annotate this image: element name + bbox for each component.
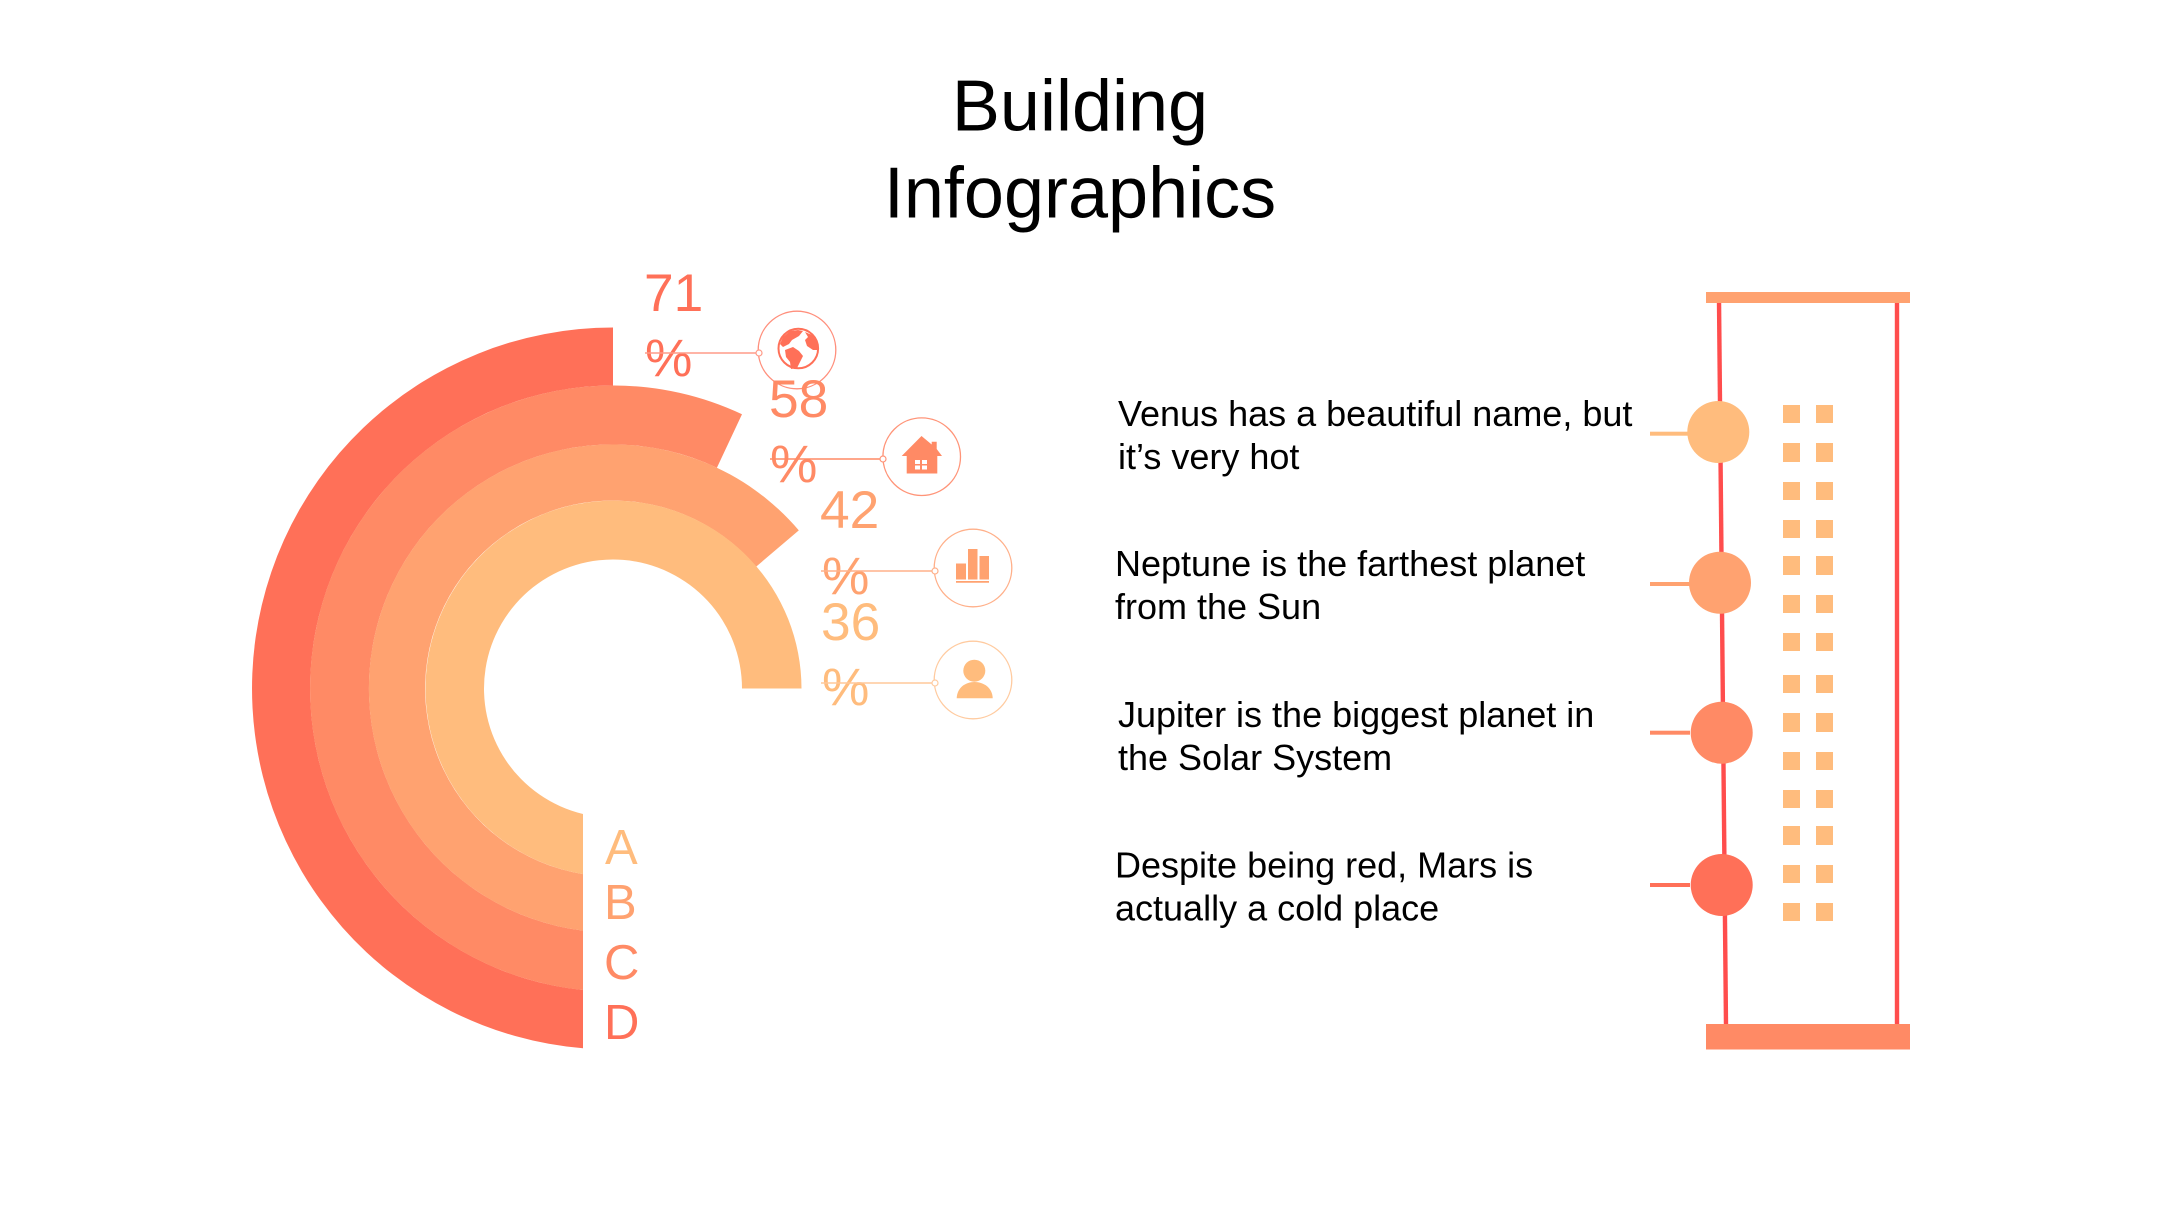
icon ring [934,529,1012,607]
icon: globe [778,329,818,369]
text: Mars: actually a cold place [1115,888,1439,928]
connector line [770,458,883,460]
connector line [821,682,935,684]
ring A [426,501,802,874]
connector line [821,570,935,572]
ring D [252,328,613,1048]
ring label C: C [604,936,639,990]
building base [1706,1024,1910,1050]
text: Venus: Venus has a beautiful name, but [1118,393,1632,434]
connector dot [756,350,762,356]
title: Infographics [884,153,1276,233]
connector dot [880,456,886,462]
text: Mars: Despite being red, Mars is [1115,844,1533,886]
icon: person [957,660,993,698]
callout: 42% chart [820,481,1012,607]
text: Neptune: from the Sun [1115,586,1321,627]
title: Building [952,67,1208,147]
ring B [369,444,799,931]
ring C [310,385,742,990]
building left wall [1719,300,1726,1026]
building roof [1706,292,1910,303]
value 42%: 42 [820,481,879,540]
connector dot [932,568,938,574]
ring label D: D [604,996,639,1050]
text: Jupiter: Jupiter is the biggest planet in [1118,694,1594,735]
marker: Neptune [1650,552,1751,614]
panel: radial bar chart [252,328,802,1050]
ring label A: A [605,821,638,875]
value 58%: % [770,435,817,494]
building windows [1783,405,1833,921]
icon ring [934,641,1012,719]
marker: Mars [1650,854,1753,916]
value 71%: % [645,329,692,388]
icon: bar chart [956,549,989,583]
connector dot [932,680,938,686]
icon: house [902,436,942,474]
value 71%: 71 [644,264,703,323]
callout: 36% person [821,593,1012,719]
callout: 71% globe [644,264,836,389]
connector line [645,352,759,354]
text: Jupiter: the Solar System [1118,737,1392,778]
icon ring [883,418,960,496]
building right wall [1895,300,1899,1026]
icon ring [758,311,836,389]
panel: building [1650,292,1910,1050]
value 58%: 58 [769,370,828,429]
text: Venus: it’s very hot [1118,436,1299,477]
value 36%: % [822,658,869,717]
marker: Venus [1650,401,1749,463]
callout: 58% house [769,370,960,496]
text: Neptune: Neptune is the farthest planet [1115,543,1585,584]
value 36%: 36 [821,593,880,652]
ring label B: B [604,876,637,930]
marker: Jupiter [1650,702,1753,764]
value 42%: % [822,547,869,606]
